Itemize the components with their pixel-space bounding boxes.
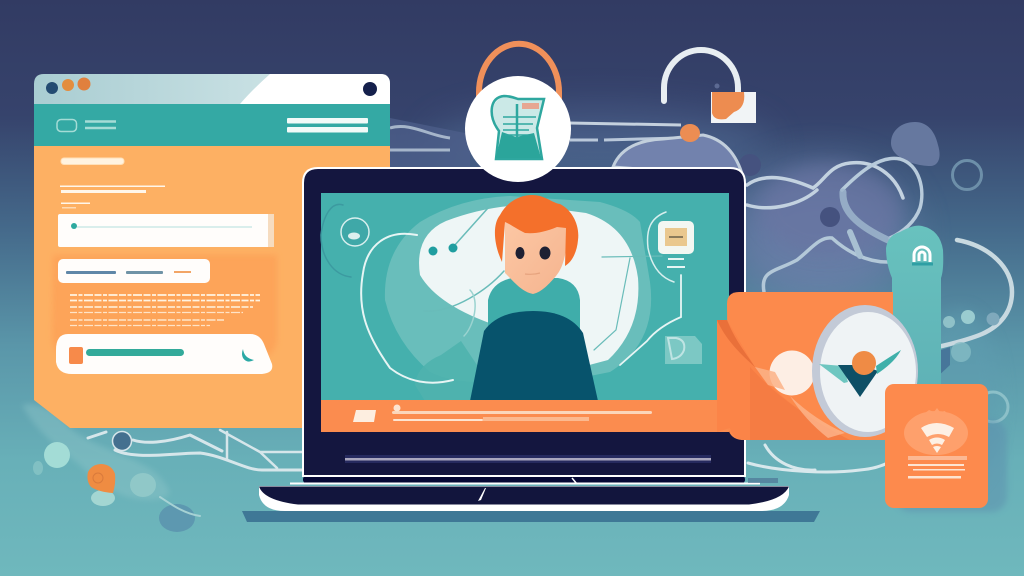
orange wifi card (885, 384, 1007, 512)
screen icon: document card (658, 221, 694, 267)
node: orange dot (680, 124, 700, 142)
screen: pale backdrop blobs (385, 196, 651, 401)
pale blobs: lower left background (22, 404, 195, 532)
nav logo and links (57, 120, 116, 132)
check mark orange ball (852, 351, 876, 375)
person hair (495, 195, 578, 266)
person (470, 195, 598, 401)
envelope lower panel shading (750, 367, 850, 440)
person torso (488, 278, 580, 340)
node: navy dot lower left (112, 432, 132, 450)
envelope flap shading (717, 320, 755, 367)
badge face (820, 312, 916, 432)
laptop screen (321, 193, 729, 401)
laptop lid (303, 168, 745, 476)
background haze and blobs: right side (430, 110, 1000, 490)
nav menu bars (287, 118, 368, 132)
envelope left and lower front (717, 320, 850, 440)
card shadow (895, 420, 1007, 512)
person eyes (516, 246, 550, 260)
cream seal (770, 350, 814, 396)
background ring: upper right (952, 160, 982, 190)
glow crown (925, 408, 948, 416)
browser window (34, 74, 390, 428)
padlock shackle: orange (479, 44, 559, 100)
darker orange form panel (52, 255, 277, 356)
laptop base shadow (242, 511, 820, 522)
open padlock: white hook and orange body (664, 50, 756, 123)
hinge strip (290, 476, 778, 484)
teal pillar with lock icon (886, 226, 943, 438)
browser title bar (34, 74, 390, 104)
person mouth (525, 273, 540, 274)
icon: teal document (492, 96, 545, 159)
card text lines (908, 456, 967, 478)
background ring: lower right (978, 392, 1008, 422)
envelope back (727, 292, 893, 440)
call to action button (56, 334, 272, 374)
padlock body: white circle with document icon (465, 76, 571, 182)
browser body: orange panel (34, 146, 390, 428)
heading line (61, 158, 124, 164)
dots and small shapes: right of pillar (935, 310, 1000, 379)
form pill with tabs (58, 259, 210, 283)
form input (58, 214, 274, 247)
window control dots (46, 78, 377, 96)
screen: network lines and nodes (321, 204, 681, 383)
screen icon: faded badge (665, 336, 702, 364)
footer progress lines (392, 404, 652, 421)
body copy lines (70, 295, 260, 326)
badge rim (812, 305, 918, 437)
network backdrop behind laptop top (390, 118, 743, 177)
card body (885, 384, 988, 508)
browser nav bar (34, 104, 390, 146)
bluish dome with outline (613, 135, 743, 177)
icon: wifi (921, 423, 954, 453)
wifi glow (904, 411, 968, 455)
title bar white swoosh (240, 74, 390, 104)
icon: small lock on pillar (912, 247, 933, 264)
connector lines: lower left (88, 430, 302, 516)
dark flowers behind laptop corner (739, 154, 840, 227)
sub heading lines (60, 186, 165, 208)
laptop base (259, 486, 789, 511)
screen nodes: teal dots (428, 244, 458, 256)
connector lines: right side (747, 158, 1012, 472)
person chair back (470, 311, 598, 401)
person face (505, 222, 566, 294)
laptop (242, 168, 820, 522)
check mark (819, 350, 901, 397)
seal swoosh (755, 367, 845, 438)
screen footer bar (321, 400, 729, 432)
icon: orange badge lower left (87, 464, 115, 493)
lower bezel light bar (345, 455, 711, 463)
clock badge with check mark (812, 305, 918, 437)
screen node: left bubble (341, 218, 369, 246)
footer badge (353, 410, 376, 422)
envelope (717, 292, 893, 440)
trackpad notch mark (478, 488, 486, 501)
